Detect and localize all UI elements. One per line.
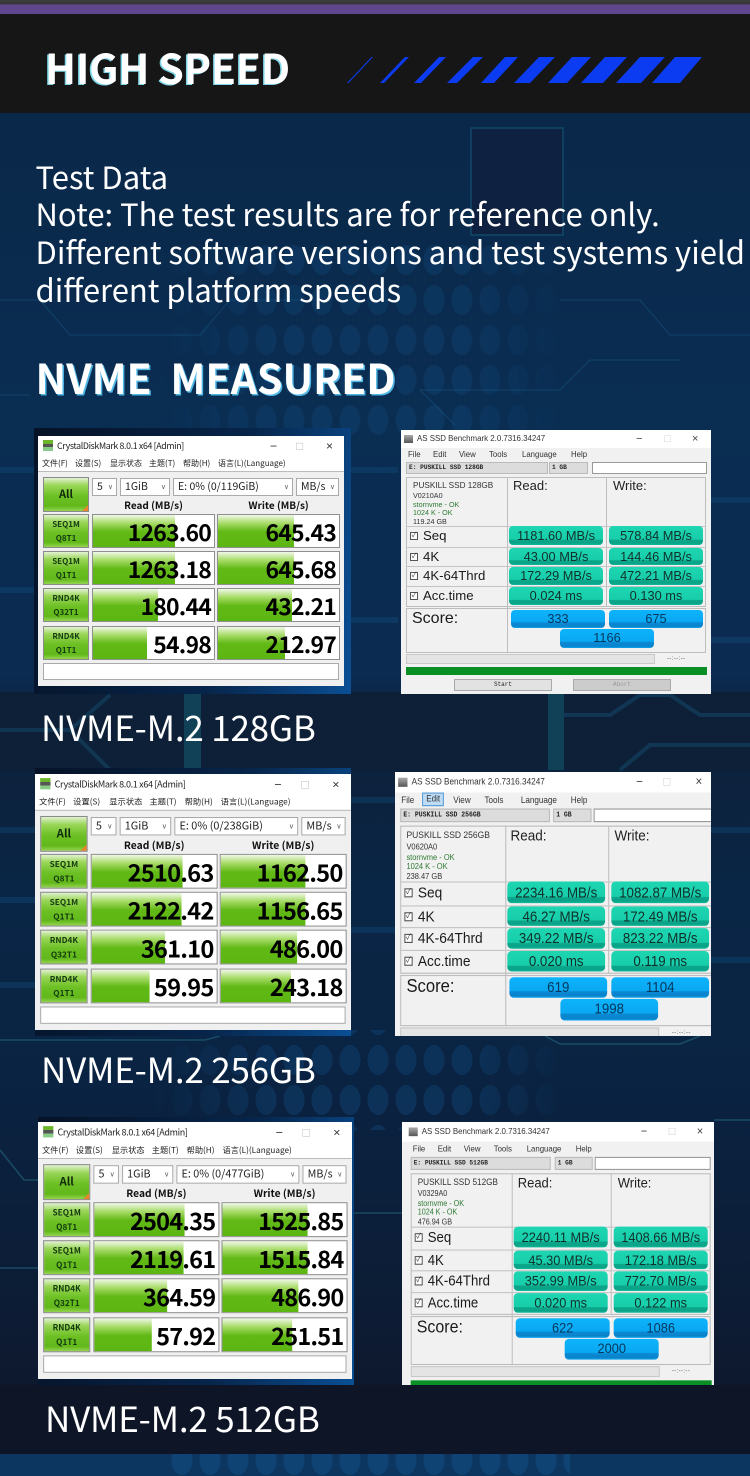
panel: crystaldiskmark 128GB: 帮助(H) [183, 458, 210, 469]
panel: as ssd 256GB: − [636, 775, 643, 789]
panel: as ssd 256GB: 46.27 MB/s [523, 908, 590, 925]
panel: crystaldiskmark 128GB: Q1T1 [56, 570, 76, 581]
panel: crystaldiskmark 256GB: 语言(L)(Language) [221, 797, 291, 808]
panel: as ssd 128GB: stornvme - OK [413, 500, 459, 509]
panel: crystaldiskmark 256GB: 486.00 [270, 930, 343, 964]
panel: as ssd 512GB: × [697, 1125, 703, 1138]
panel: crystaldiskmark 256GB: □ [301, 777, 309, 791]
panel: crystaldiskmark 512GB: □ [302, 1125, 310, 1139]
caption: 256GB: NVME-M.2 256GB [41, 1043, 316, 1094]
panel: as ssd 512GB: Seq [428, 1229, 451, 1245]
panel: as ssd 512GB: □ [669, 1125, 675, 1138]
panel: as ssd 128GB: − [636, 433, 642, 445]
panel: as ssd 256GB: 4K-64Thrd [418, 929, 483, 946]
panel: as ssd 512GB: Tools [494, 1144, 512, 1154]
panel: crystaldiskmark 512GB: Q1T1 [56, 1260, 77, 1271]
panel: crystaldiskmark 128GB: 1263.18 [128, 551, 211, 585]
panel: crystaldiskmark 512GB: 1515.84 [258, 1240, 343, 1275]
panel: as ssd 256GB: Help [571, 795, 587, 805]
panel: as ssd 256GB: Tools [484, 795, 503, 805]
panel: as ssd 256GB: E: PUSKILL SSD 256GB [403, 811, 481, 819]
panel: crystaldiskmark 256GB: Q1T1 [53, 911, 75, 922]
panel: crystaldiskmark 256GB: 显示状态 [109, 797, 142, 808]
panel: crystaldiskmark 512GB: SEQ1M [53, 1245, 81, 1257]
panel: as ssd 128GB: File [408, 450, 421, 459]
panel: crystaldiskmark 128GB: Write (MB/s) [248, 497, 309, 512]
caption: 128GB: NVME-M.2 128GB [41, 701, 316, 752]
panel: crystaldiskmark 256GB: − [274, 777, 282, 791]
panel: crystaldiskmark 256GB: Read (MB/s) [124, 836, 184, 852]
panel: as ssd 128GB: PUSKILL SSD 128GB [413, 481, 493, 490]
panel: crystaldiskmark 256GB: SEQ1M [50, 859, 78, 870]
panel: crystaldiskmark 256GB: 2510.63 [128, 854, 214, 889]
panel: as ssd 128GB: Abort [613, 681, 631, 688]
panel: as ssd 128GB: 1 GB [552, 464, 567, 471]
panel: crystaldiskmark 128GB: CrystalDiskMark 8.0.1 x64 [Admin] [57, 439, 184, 452]
panel: as ssd 256GB: Edit [426, 794, 440, 804]
panel: crystaldiskmark 512GB: Q1T1 [56, 1337, 77, 1348]
panel: crystaldiskmark 128GB: MB/s [301, 478, 325, 494]
panel: crystaldiskmark 256GB: Write (MB/s) [252, 836, 314, 852]
panel: crystaldiskmark 128GB: Q1T1 [56, 645, 76, 656]
panel: as ssd 512GB: ✓ [416, 1233, 421, 1241]
panel: as ssd 256GB: 172.49 MB/s [623, 908, 698, 925]
panel: as ssd 128GB [401, 430, 711, 694]
panel: as ssd 256GB: 823.22 MB/s [623, 929, 698, 946]
panel: as ssd 128GB: Tools [489, 450, 507, 459]
panel: as ssd 256GB: ✓ [406, 957, 411, 965]
panel: as ssd 128GB: 1166 [593, 630, 621, 645]
panel: as ssd 512GB: 2240.11 MB/s [522, 1229, 600, 1245]
panel: crystaldiskmark 512GB: All [60, 1173, 74, 1190]
panel: crystaldiskmark 256GB: 243.18 [270, 969, 343, 1003]
panel: as ssd 256GB: Score: [406, 977, 455, 997]
panel: as ssd 512GB: Help [576, 1144, 592, 1154]
panel: as ssd 512GB: PUSKILL SSD 512GB [418, 1178, 498, 1187]
panel: as ssd 256GB: Language [521, 795, 557, 805]
panel: as ssd 128GB: ✓ [412, 592, 416, 599]
panel: crystaldiskmark 256GB: ∨ [162, 822, 167, 830]
panel: as ssd 512GB [402, 1122, 714, 1385]
panel: as ssd 128GB: × [692, 433, 698, 445]
panel: as ssd 128GB: 4K-64Thrd [423, 568, 485, 583]
panel: as ssd 512GB: View [464, 1144, 480, 1154]
panel: as ssd 256GB: 1 GB [556, 811, 572, 819]
panel: crystaldiskmark 256GB: ∨ [336, 822, 342, 830]
panel: crystaldiskmark 256GB: E: 0% (0/238GiB) [179, 818, 263, 833]
panel: as ssd 512GB: 2000 [597, 1340, 626, 1356]
panel: as ssd 512GB: E: PUSKILL SSD 512GB [414, 1159, 488, 1167]
heading: high speed: HIGH SPEED [45, 36, 290, 96]
panel: as ssd 512GB: 622 [552, 1319, 573, 1336]
panel: as ssd 256GB: V0620A0 [406, 842, 437, 852]
panel: as ssd 512GB: --:--:-- [672, 1368, 690, 1375]
panel: as ssd 256GB: × [696, 775, 702, 789]
heading: nvme measured: NVME MEASURED [36, 346, 396, 406]
panel: as ssd 256GB: 2234.16 MB/s [515, 884, 597, 901]
panel: as ssd 128GB: 144.46 MB/s [620, 549, 692, 564]
panel: as ssd 256GB: 0.020 ms [529, 952, 584, 969]
panel: as ssd 512GB: File [413, 1144, 425, 1154]
panel: crystaldiskmark 512GB: 5 [98, 1166, 104, 1181]
panel: crystaldiskmark 128GB: 645.68 [265, 551, 336, 585]
panel: crystaldiskmark 256GB: All [57, 825, 71, 842]
panel: as ssd 256GB [395, 772, 711, 1036]
panel: crystaldiskmark 128GB: 432.21 [265, 588, 336, 622]
panel: crystaldiskmark 128GB: 设置(S) [75, 458, 101, 469]
panel: crystaldiskmark 256GB: RND4K [50, 935, 78, 946]
panel: as ssd 512GB: 1024 K - OK [418, 1207, 457, 1217]
panel: crystaldiskmark 512GB: 文件(F) [42, 1145, 69, 1156]
panel: as ssd 128GB: --:--:-- [667, 656, 686, 662]
panel: crystaldiskmark 128GB: 645.43 [265, 514, 336, 548]
panel: crystaldiskmark 128GB: 1263.60 [128, 514, 211, 548]
panel: as ssd 512GB: ✓ [416, 1277, 421, 1284]
panel: as ssd 128GB: 0.130 ms [630, 588, 682, 603]
panel: crystaldiskmark 128GB: Q32T1 [53, 607, 79, 618]
panel: as ssd 512GB: 1086 [646, 1319, 675, 1336]
panel: as ssd 512GB: 772.70 MB/s [625, 1272, 697, 1289]
panel: as ssd 128GB: E: PUSKILL SSD 128GB [409, 464, 483, 471]
panel: crystaldiskmark 512GB: 显示状态 [112, 1145, 145, 1156]
panel: crystaldiskmark 512GB: ∨ [164, 1170, 169, 1178]
panel: crystaldiskmark 512GB: ∨ [110, 1170, 115, 1178]
panel: crystaldiskmark 128GB: 显示状态 [110, 458, 142, 469]
panel: as ssd 256GB: 1024 K - OK [406, 861, 448, 871]
panel: as ssd 256GB: View [453, 795, 471, 805]
panel: crystaldiskmark 128GB: 文件(F) [42, 458, 68, 469]
panel: crystaldiskmark 512GB: RND4K [53, 1322, 81, 1334]
icon: speed stripes [347, 57, 702, 83]
panel: as ssd 256GB: 0.119 ms [633, 952, 687, 969]
panel: crystaldiskmark 512GB: × [333, 1125, 340, 1139]
panel: crystaldiskmark 256GB: Q1T1 [53, 988, 75, 999]
text block: test data note: Different software versions and test systems yield [36, 228, 745, 273]
panel: crystaldiskmark 512GB: Q32T1 [54, 1298, 80, 1309]
panel: as ssd 256GB: 1082.87 MB/s [619, 884, 701, 901]
text block: test data note: Test Data [36, 153, 168, 198]
panel: crystaldiskmark 128GB: ∨ [161, 482, 166, 490]
panel: as ssd 512GB: V0329A0 [418, 1188, 447, 1198]
panel: crystaldiskmark 512GB: 帮助(H) [187, 1145, 215, 1156]
panel: crystaldiskmark 128GB: 180.44 [140, 588, 211, 622]
panel: crystaldiskmark 256GB: 1156.65 [257, 892, 343, 927]
panel: as ssd 512GB: Read: [518, 1174, 552, 1191]
panel: crystaldiskmark 512GB: SEQ1M [53, 1207, 81, 1219]
panel: crystaldiskmark 128GB: SEQ1M [52, 556, 80, 567]
panel: crystaldiskmark 128GB: ∨ [284, 482, 289, 490]
panel: as ssd 128GB: V0210A0 [413, 491, 443, 500]
panel: as ssd 256GB: 4K [418, 908, 435, 925]
panel: as ssd 256GB: 238.47 GB [406, 871, 442, 881]
panel: as ssd 256GB: 1998 [594, 1000, 624, 1017]
panel: as ssd 128GB: Start [494, 681, 512, 688]
panel: crystaldiskmark 512GB: 486.90 [271, 1278, 343, 1313]
header band [0, 14, 750, 113]
panel: crystaldiskmark 256GB: 1GiB [125, 818, 148, 833]
panel: crystaldiskmark 256GB: 设置(S) [73, 797, 100, 808]
panel: crystaldiskmark 128GB: × [326, 439, 333, 453]
panel: crystaldiskmark 256GB: 59.95 [154, 969, 214, 1003]
panel: as ssd 512GB: Edit [438, 1144, 451, 1154]
panel: crystaldiskmark 256GB: CrystalDiskMark 8.0.1 x64 [Admin] [55, 777, 186, 790]
panel: as ssd 512GB: AS SSD Benchmark 2.0.7316.34247 [422, 1126, 550, 1136]
panel: crystaldiskmark 128GB: E: 0% (0/119GiB) [178, 478, 259, 494]
panel: crystaldiskmark 256GB: MB/s [306, 818, 332, 833]
panel: crystaldiskmark 128GB: Q8T1 [56, 533, 76, 544]
panel: as ssd 256GB: 349.22 MB/s [519, 929, 594, 946]
panel: crystaldiskmark 256GB: Q8T1 [53, 873, 75, 885]
panel: as ssd 256GB: 1104 [646, 978, 675, 995]
panel: crystaldiskmark 256GB: ∨ [289, 822, 294, 830]
panel: crystaldiskmark 128GB: − [270, 439, 277, 453]
panel: crystaldiskmark 256GB: × [332, 777, 339, 791]
panel: as ssd 256GB: Read: [510, 827, 547, 844]
panel: crystaldiskmark 512GB: CrystalDiskMark 8.0.1 x64 [Admin] [57, 1125, 188, 1138]
panel: as ssd 128GB: ✓ [412, 532, 416, 539]
panel: as ssd 256GB: File [401, 795, 414, 805]
panel: as ssd 512GB: Write: [618, 1174, 651, 1191]
panel: as ssd 128GB: Help [571, 450, 587, 459]
panel: crystaldiskmark 128GB: 1GiB [125, 478, 148, 494]
panel: as ssd 256GB: PUSKILL SSD 256GB [406, 830, 490, 840]
panel: as ssd 128GB: 172.29 MB/s [520, 568, 592, 583]
panel: as ssd 128GB: 1024 K - OK [413, 508, 453, 517]
panel: crystaldiskmark 512GB: Write (MB/s) [254, 1185, 315, 1200]
panel: crystaldiskmark 128GB: 语言(L)(Language) [218, 458, 286, 469]
panel: crystaldiskmark 128GB: 54.98 [153, 626, 211, 660]
panel: crystaldiskmark 512GB: 1525.85 [258, 1202, 343, 1237]
panel: as ssd 128GB: AS SSD Benchmark 2.0.7316.34247 [417, 434, 545, 443]
panel: as ssd 128GB: Language [522, 450, 557, 459]
panel: as ssd 128GB: 1181.60 MB/s [517, 528, 595, 543]
caption: 512GB: NVME-M.2 512GB [45, 1392, 320, 1443]
panel: as ssd 512GB: ✓ [416, 1256, 421, 1264]
panel: as ssd 256GB: □ [663, 775, 670, 789]
panel: as ssd 512GB: stornvme - OK [418, 1198, 464, 1208]
panel: crystaldiskmark 512GB: Read (MB/s) [126, 1185, 186, 1200]
panel: crystaldiskmark 256GB [35, 774, 351, 1030]
panel: crystaldiskmark 512GB: ∨ [337, 1170, 342, 1178]
panel: as ssd 512GB: 4K [428, 1252, 444, 1268]
panel: as ssd 128GB: Score: [412, 610, 458, 627]
panel: as ssd 128GB: 43.00 MB/s [524, 549, 588, 564]
panel: as ssd 128GB: ✓ [412, 572, 416, 579]
panel: crystaldiskmark 512GB: ∨ [290, 1170, 295, 1178]
panel frame: crystaldiskmark 256GB [35, 768, 351, 1036]
panel: as ssd 512GB: − [641, 1125, 647, 1138]
panel: crystaldiskmark 512GB: MB/s [308, 1166, 333, 1181]
panel: crystaldiskmark 512GB: 364.59 [143, 1278, 215, 1313]
panel: crystaldiskmark 256GB: 5 [96, 818, 102, 833]
panel: as ssd 512GB: Language [527, 1144, 561, 1154]
panel: as ssd 256GB: ✓ [406, 912, 411, 920]
panel: crystaldiskmark 256GB: 主题(T) [150, 797, 177, 808]
panel: crystaldiskmark 256GB: SEQ1M [50, 897, 78, 908]
panel: as ssd 128GB: ✓ [412, 553, 416, 560]
panel: crystaldiskmark 512GB: − [276, 1125, 283, 1139]
panel: as ssd 512GB: 0.122 ms [634, 1294, 687, 1311]
panel: crystaldiskmark 128GB: RND4K [52, 631, 80, 642]
panel: crystaldiskmark 256GB: 帮助(H) [185, 797, 213, 808]
panel: as ssd 256GB: ✓ [406, 888, 411, 896]
panel: crystaldiskmark 512GB: 251.51 [271, 1317, 343, 1352]
panel: crystaldiskmark 512GB: 设置(S) [76, 1145, 103, 1156]
panel: as ssd 128GB: Seq [423, 528, 446, 543]
panel: crystaldiskmark 128GB: ∨ [108, 482, 113, 490]
panel: crystaldiskmark 256GB: 1162.50 [257, 854, 343, 889]
panel: as ssd 128GB: 578.84 MB/s [620, 528, 692, 543]
top purple bar [0, 0, 750, 14]
panel: crystaldiskmark 128GB: □ [296, 439, 303, 453]
panel: crystaldiskmark 512GB: Q8T1 [56, 1222, 77, 1233]
text block: test data note: Note: The test results are for reference only. [36, 190, 660, 235]
panel: crystaldiskmark 128GB: RND4K [52, 593, 80, 604]
panel: as ssd 256GB: Write: [614, 827, 650, 844]
panel: crystaldiskmark 128GB: ∨ [330, 482, 335, 490]
panel: crystaldiskmark 256GB: ∨ [107, 822, 112, 830]
panel: as ssd 128GB: 4K [423, 549, 439, 564]
panel: as ssd 128GB: Read: [513, 478, 548, 493]
panel: crystaldiskmark 512GB: 2504.35 [130, 1202, 215, 1237]
panel frame: crystaldiskmark 128GB [34, 428, 351, 694]
panel: as ssd 128GB: 0.024 ms [530, 588, 582, 603]
text block: test data note: different platform speeds [36, 266, 401, 311]
panel: as ssd 512GB: 352.99 MB/s [525, 1272, 597, 1289]
panel: crystaldiskmark 256GB: Q32T1 [51, 949, 77, 960]
panel: as ssd 128GB: Edit [433, 450, 446, 459]
panel: crystaldiskmark 512GB: E: 0% (0/477GiB) [182, 1166, 264, 1181]
panel: crystaldiskmark 128GB: 212.97 [265, 626, 336, 660]
panel: crystaldiskmark 128GB: All [59, 486, 73, 502]
panel frame: crystaldiskmark 512GB [38, 1117, 354, 1385]
panel: crystaldiskmark 512GB: 57.92 [156, 1317, 215, 1352]
text block: test data note [36, 153, 745, 311]
panel: crystaldiskmark 256GB: 361.10 [141, 930, 214, 964]
panel: crystaldiskmark 512GB [38, 1122, 352, 1379]
panel: as ssd 256GB: ✓ [406, 934, 411, 942]
panel: as ssd 128GB: 675 [645, 611, 667, 626]
panel: as ssd 512GB: Score: [417, 1318, 463, 1337]
panel: as ssd 512GB: 1408.66 MB/s [621, 1229, 700, 1245]
panel: crystaldiskmark 256GB: RND4K [50, 974, 78, 985]
panel: as ssd 512GB: 45.30 MB/s [528, 1252, 593, 1268]
panel: as ssd 512GB: ✓ [416, 1299, 421, 1306]
panel: as ssd 256GB: AS SSD Benchmark 2.0.7316.34247 [412, 777, 545, 787]
panel: as ssd 256GB: 619 [547, 978, 569, 995]
panel: as ssd 128GB: View [459, 450, 476, 459]
panel: as ssd 128GB: Acc.time [423, 588, 474, 603]
panel: crystaldiskmark 256GB: 2122.42 [128, 892, 214, 927]
panel: as ssd 128GB: 333 [547, 611, 569, 626]
panel: crystaldiskmark 256GB: 文件(F) [39, 797, 66, 808]
panel: as ssd 128GB: 119.24 GB [413, 517, 447, 526]
panel: crystaldiskmark 128GB [38, 436, 344, 686]
panel: as ssd 512GB: 172.18 MB/s [625, 1252, 697, 1268]
panel: as ssd 512GB: 0.020 ms [534, 1294, 587, 1311]
panel: as ssd 128GB: □ [664, 433, 671, 445]
panel: crystaldiskmark 512GB: RND4K [53, 1283, 81, 1295]
panel: crystaldiskmark 128GB: Read (MB/s) [124, 497, 183, 512]
panel: crystaldiskmark 512GB: 2119.61 [130, 1240, 215, 1275]
panel: as ssd 128GB: Write: [613, 478, 647, 493]
panel: as ssd 512GB: Acc.time [428, 1294, 478, 1311]
panel: as ssd 512GB: 1 GB [558, 1159, 573, 1167]
panel: as ssd 512GB: 4K-64Thrd [428, 1272, 490, 1289]
panel: as ssd 256GB: Seq [418, 884, 442, 901]
panel: as ssd 128GB: 472.21 MB/s [620, 568, 692, 583]
panel: crystaldiskmark 128GB: 主题(T) [149, 458, 175, 469]
panel: crystaldiskmark 512GB: 1GiB [127, 1166, 151, 1181]
panel: as ssd 512GB: 476.94 GB [418, 1217, 452, 1227]
panel: crystaldiskmark 128GB: SEQ1M [52, 519, 80, 530]
panel: crystaldiskmark 128GB: 5 [97, 478, 103, 494]
panel: crystaldiskmark 512GB: 语言(L)(Language) [222, 1145, 292, 1156]
panel: as ssd 256GB: Acc.time [418, 952, 470, 969]
panel: as ssd 256GB: stornvme - OK [406, 852, 455, 862]
panel: crystaldiskmark 512GB: 主题(T) [152, 1145, 179, 1156]
